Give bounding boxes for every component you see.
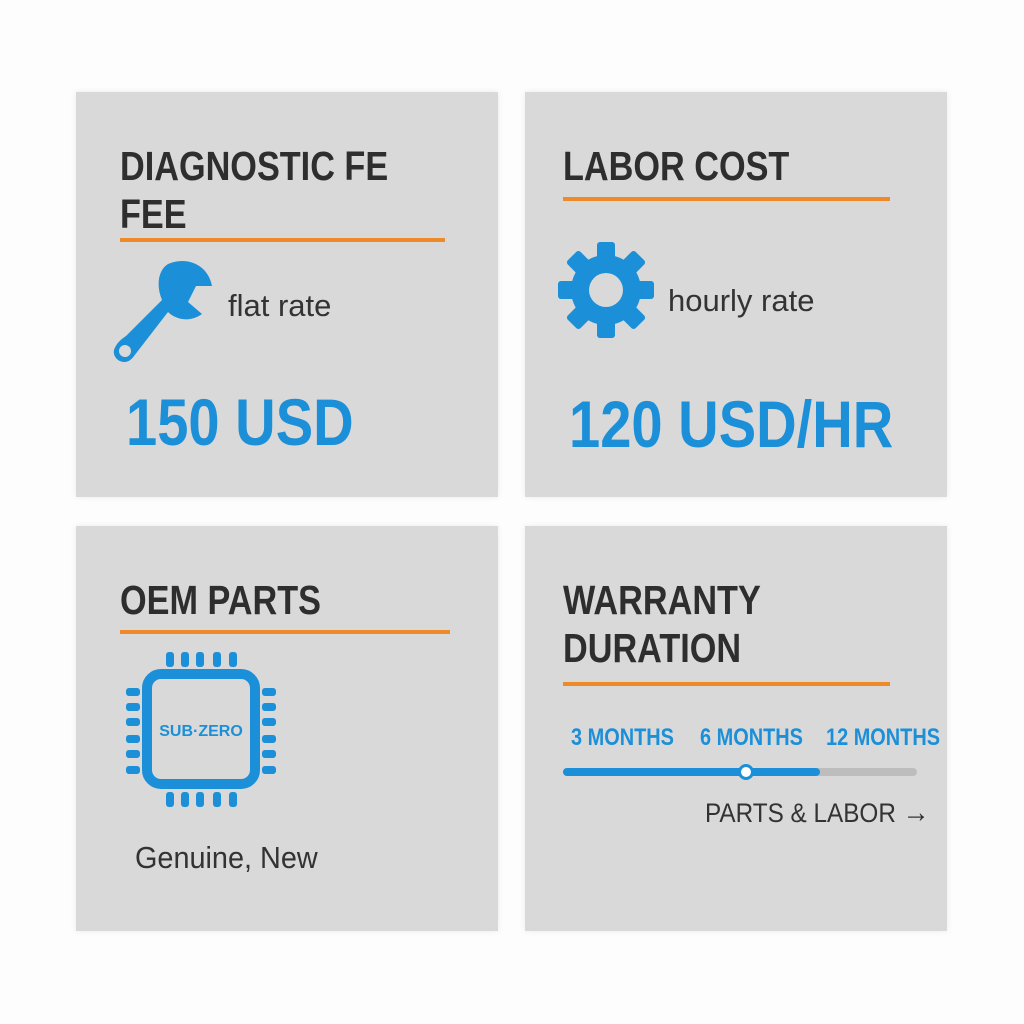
heading: LABOR COST xyxy=(563,143,789,189)
heading: FEE xyxy=(120,191,187,237)
underline xyxy=(563,197,890,201)
timeline labels xyxy=(571,724,940,751)
timeline labels: 6 MONTHS xyxy=(700,724,803,751)
heading: DURATION xyxy=(563,625,741,671)
panel: warranty xyxy=(525,526,947,931)
icon: chip xyxy=(126,652,276,807)
panel: diagnostic fee xyxy=(76,92,498,497)
timeline labels: 3 MONTHS xyxy=(571,724,674,751)
text: genuine new: Genuine, New xyxy=(135,840,318,875)
icon: gear xyxy=(558,242,654,338)
timeline bar xyxy=(563,764,917,780)
timeline labels: 12 MONTHS xyxy=(826,724,940,751)
text: parts & labor arrow: PARTS & LABOR → xyxy=(705,796,930,829)
icon: wrench xyxy=(114,261,212,362)
underline xyxy=(120,630,450,634)
value: 120 USD/HR xyxy=(569,387,893,461)
heading: WARRANTY xyxy=(563,577,761,623)
panel: labor cost xyxy=(525,92,947,497)
underline xyxy=(563,682,890,686)
underline xyxy=(120,238,445,242)
heading: OEM PARTS xyxy=(120,577,321,623)
icon: chip: SUB·ZERO xyxy=(159,723,243,740)
heading: DIAGNOSTIC FE xyxy=(120,143,388,189)
heading xyxy=(563,577,761,671)
text: hourly rate: hourly rate xyxy=(668,283,814,318)
heading xyxy=(120,143,388,237)
text: flat rate: flat rate xyxy=(228,288,331,323)
panel: oem parts xyxy=(76,526,498,931)
value: 150 USD xyxy=(126,385,354,459)
